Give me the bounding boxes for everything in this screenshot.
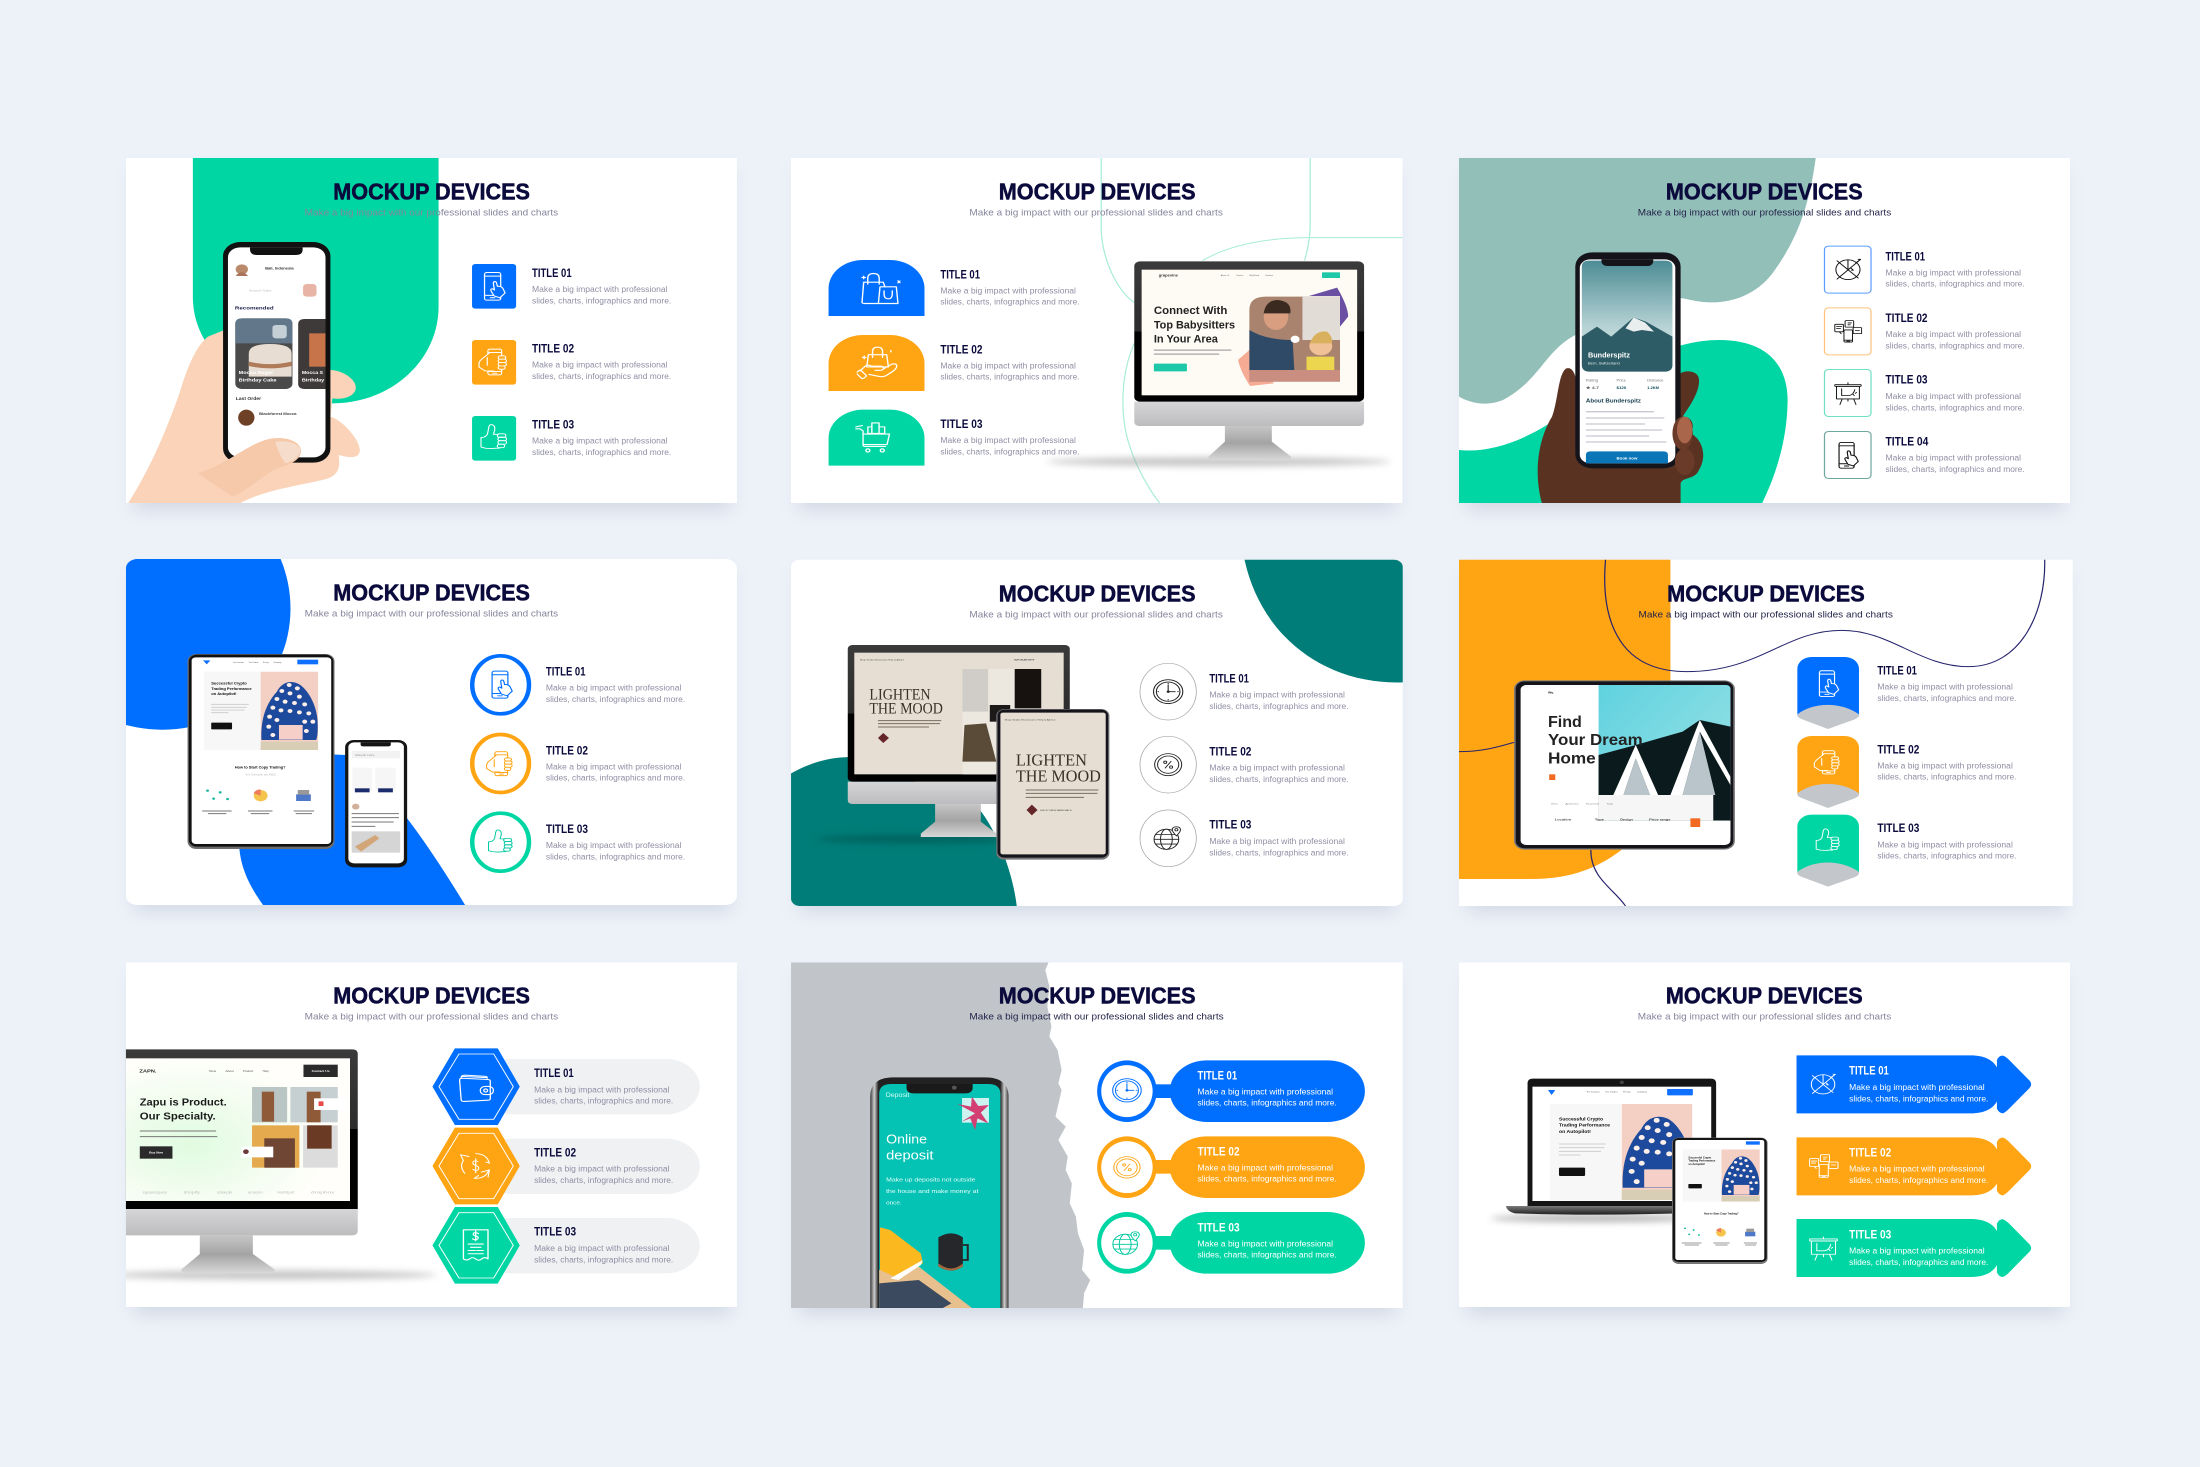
subheading: Make a big impact with our professional slides and charts	[305, 208, 558, 218]
item: title 02	[432, 1128, 700, 1204]
hand holding phone: Rating	[1586, 379, 1598, 383]
monitor mockup: Contact	[1265, 274, 1273, 277]
panel: slide 1 phone in hand	[126, 158, 737, 512]
item: title 03	[432, 1207, 700, 1284]
monitor mockup	[817, 645, 1070, 843]
item: title 01: Make a big impact with professional	[940, 286, 1076, 295]
monitor mockup: ZAPN.	[139, 1069, 157, 1074]
item: title 03: slides, charts, infographics and more.	[1198, 1251, 1337, 1259]
teal blob top right	[1244, 560, 1403, 682]
item: title 03	[1824, 369, 2025, 416]
hand holding phone: Bunderspitz	[1588, 351, 1630, 359]
item: title 02: Make a big impact with professional	[1849, 1165, 1985, 1173]
hand holding phone: Birthday	[302, 378, 325, 383]
panel: slide 6 tablet with curve	[1459, 560, 2073, 913]
subheading: Make a big impact with our professional slides and charts	[1639, 610, 1893, 620]
hand holding phone: Price	[1617, 379, 1626, 383]
tablet mockup: For Investors	[233, 661, 244, 664]
item: title 03: Make a big impact with professional	[1849, 1247, 1985, 1255]
hand holding phone: Bern, Switzerland	[1588, 362, 1620, 366]
monitor mockup: Product	[243, 1069, 253, 1073]
item: title 03	[829, 410, 1080, 466]
item: title 03: Make a big impact with professional	[1886, 392, 2021, 401]
item: title 01: TITLE 01	[546, 665, 586, 678]
tablet mockup: Wy.	[1548, 691, 1554, 694]
hand holding phone: Mocca Sugar	[239, 370, 274, 376]
tablet mockup: Home	[1548, 749, 1596, 767]
item: title 01	[1097, 1060, 1365, 1122]
item: title 02: TITLE 02	[1198, 1145, 1240, 1158]
item: title 01: TITLE 01	[1886, 250, 1925, 263]
monitor mockup	[110, 1049, 437, 1280]
laptop mockup	[1491, 1079, 1716, 1222]
item: title 03: TITLE 03	[1849, 1228, 1891, 1241]
torn grey paper	[791, 962, 1090, 1308]
item: title 02: Make a big impact with professional	[532, 361, 668, 369]
item: title 02	[829, 335, 1080, 391]
item: title 02: Make a big impact with professional	[940, 361, 1076, 370]
item: title 04: Make a big impact with professional	[1886, 454, 2021, 462]
item: title 03: slides, charts, infographics and more.	[546, 852, 685, 861]
item: title 01: slides, charts, infographics and more.	[1877, 694, 2017, 703]
monitor mockup: About Us	[1221, 274, 1230, 277]
heading: MOCKUP DEVICES	[333, 581, 530, 606]
tablet mockup: LIGHTEN	[1016, 751, 1087, 770]
monitor mockup: Buy Now	[149, 1151, 163, 1155]
item: title 01: TITLE 01	[1198, 1069, 1238, 1082]
item: title 03: slides, charts, infographics and more.	[534, 1255, 673, 1264]
item: title 02	[1097, 1136, 1365, 1198]
subheading: Make a big impact with our professional slides and charts	[1638, 1012, 1891, 1022]
item: title 02	[1140, 736, 1349, 793]
item: title 02: TITLE 02	[546, 744, 588, 757]
item: title 01: TITLE 01	[1877, 664, 1917, 677]
item: title 03: TITLE 03	[546, 822, 588, 836]
monitor mockup: dropbox	[311, 1190, 334, 1194]
item: title 01: Make a big impact with professional	[1886, 268, 2021, 277]
item: title 02: Make a big impact with professional	[534, 1165, 670, 1173]
hand holding phone: Birthday Cake	[239, 378, 277, 383]
laptop mockup: Company	[1637, 1092, 1648, 1094]
subheading: Make a big impact with our professional slides and charts	[305, 609, 558, 619]
heading: MOCKUP DEVICES	[333, 180, 530, 205]
item: title 02: slides, charts, infographics and more.	[940, 373, 1080, 381]
monitor mockup: About	[226, 1069, 234, 1073]
panel: slide 7 monitor and hexagons	[110, 962, 737, 1316]
tablet mockup: It's Simple as ABC	[246, 773, 278, 777]
tablet mockup: How to Start Copy Trading?	[235, 765, 286, 770]
item: title 02: slides, charts, infographics and more.	[546, 774, 685, 782]
item: title 03: slides, charts, infographics and more.	[1209, 848, 1349, 857]
tablet mockup: Your Dream	[1548, 731, 1643, 749]
subheading: Make a big impact with our professional slides and charts	[305, 1012, 558, 1022]
item: title 03: slides, charts, infographics and more.	[1877, 852, 2017, 860]
item: title 02	[472, 734, 685, 792]
tablet mockup: on Autopilot!	[1688, 1162, 1705, 1166]
tablet mockup: Find	[1548, 713, 1582, 731]
item: title 03: TITLE 03	[534, 1225, 576, 1238]
tablet mockup: How to Start Copy Trading?	[1704, 1212, 1739, 1216]
subheading: Make a big impact with our professional slides and charts	[969, 208, 1223, 218]
tablet mockup: Trading Performance	[1688, 1159, 1716, 1163]
item: title 01: TITLE 01	[532, 266, 572, 280]
laptop mockup: For Investors	[1587, 1091, 1601, 1094]
item: title 04: slides, charts, infographics and more.	[1886, 465, 2025, 474]
item: title 03: slides, charts, infographics and more.	[1849, 1258, 1988, 1267]
laptop mockup: For Traders	[1606, 1091, 1619, 1094]
item: title 01	[472, 264, 671, 309]
monitor mockup: amazon	[248, 1190, 263, 1194]
item: title 01	[829, 260, 1080, 316]
item: title 03: Make a big impact with professional	[534, 1244, 670, 1253]
tablet mockup: Type	[1595, 818, 1604, 822]
tablet mockup: on Autopilot!	[211, 691, 237, 696]
tablet mockup: SHOP NEW ARRIVALS	[1040, 809, 1073, 812]
tablet mockup: Home	[1551, 803, 1559, 805]
item: title 01	[432, 1048, 700, 1125]
item: title 02	[1797, 1137, 2031, 1195]
tablet mockup: Price range	[1649, 818, 1671, 822]
item: title 03: slides, charts, infographics and more.	[1886, 403, 2025, 412]
item: title 01: slides, charts, infographics and more.	[1209, 702, 1349, 711]
hand holding phone: Bali, Indonesia	[265, 267, 294, 271]
item: title 02: TITLE 02	[1877, 743, 1919, 756]
item: title 02: TITLE 02	[1209, 745, 1251, 758]
item: title 03	[1797, 815, 2017, 887]
item: title 02	[472, 340, 671, 385]
monitor mockup: In Your Area	[1154, 332, 1218, 345]
monitor mockup: Zapu is Product.	[140, 1098, 227, 1108]
item: title 03: Make a big impact with professional	[1209, 837, 1345, 846]
item: title 04: TITLE 04	[1886, 435, 1929, 448]
tablet mockup	[1514, 680, 1735, 850]
item: title 03	[1097, 1212, 1365, 1274]
item: title 02: TITLE 02	[940, 343, 982, 356]
tablet mockup: Sale	[1607, 803, 1614, 805]
monitor mockup: Contact Us	[312, 1069, 330, 1073]
monitor mockup: grapevine	[1159, 273, 1179, 278]
subheading: Make a big impact with our professional slides and charts	[969, 1012, 1224, 1022]
item: title 02: TITLE 02	[1849, 1146, 1891, 1159]
item: title 01: TITLE 01	[534, 1066, 574, 1080]
hand holding phone: Distance	[1647, 379, 1663, 383]
item: title 01	[472, 656, 685, 714]
monitor mockup: Service	[1236, 274, 1244, 277]
item: title 01: slides, charts, infographics and more.	[534, 1097, 673, 1105]
heading: MOCKUP DEVICES	[1667, 582, 1865, 607]
phone mockup: Aktuelle Links	[355, 753, 375, 757]
item: title 01	[1140, 663, 1349, 720]
laptop mockup: Pricing	[1623, 1091, 1631, 1094]
phone mockup: once.	[886, 1200, 902, 1206]
item: title 01: slides, charts, infographics and more.	[1198, 1099, 1337, 1107]
item: title 03: TITLE 03	[532, 418, 574, 431]
item: title 02: slides, charts, infographics and more.	[1209, 775, 1349, 784]
panel: slide 8 phone with torn paper	[791, 962, 1403, 1316]
heading: MOCKUP DEVICES	[999, 984, 1196, 1009]
laptop mockup: Successful Crypto	[1559, 1117, 1603, 1122]
hand holding phone: About Bunderspitz	[1586, 398, 1641, 404]
phone mockup	[870, 1077, 1009, 1310]
hand holding phone: Last Order	[236, 396, 261, 402]
tablet mockup: Pricing	[263, 662, 269, 664]
phone mockup: Online	[886, 1132, 927, 1146]
hand holding phone: 1.2KM	[1647, 385, 1659, 390]
hand holding phone: Book now	[1617, 456, 1638, 461]
item: title 02: Make a big impact with professional	[546, 762, 681, 771]
tablet mockup	[188, 654, 334, 849]
heading: MOCKUP DEVICES	[999, 180, 1196, 205]
item: title 02: slides, charts, infographics and more.	[534, 1176, 673, 1185]
heading: MOCKUP DEVICES	[333, 984, 530, 1009]
tablet mockup: Successful Crypto	[1688, 1156, 1712, 1159]
item: title 03	[472, 416, 671, 461]
monitor mockup: Shop Studio Showrooms Help & Advice	[860, 659, 905, 661]
item: title 01: slides, charts, infographics and more.	[1849, 1094, 1988, 1103]
teal blob bottom left	[791, 757, 1017, 906]
monitor mockup: Connect With	[1154, 304, 1227, 317]
orange blob	[1459, 560, 1670, 879]
item: title 01: slides, charts, infographics and more.	[1886, 280, 2025, 288]
tablet mockup	[1672, 1138, 1768, 1264]
subheading: Make a big impact with our professional slides and charts	[1638, 208, 1891, 218]
green blob	[193, 158, 439, 403]
item: title 02: slides, charts, infographics and more.	[1198, 1175, 1337, 1183]
item: title 01: TITLE 01	[1849, 1064, 1889, 1077]
item: title 01: Make a big impact with professional	[532, 285, 668, 294]
item: title 03: TITLE 03	[1198, 1221, 1240, 1234]
subheading: Make a big impact with our professional slides and charts	[969, 610, 1223, 620]
tablet mockup: Houseworld	[1586, 803, 1600, 805]
blue blob top	[126, 559, 290, 730]
tablet mockup: For Traders	[249, 662, 259, 664]
item: title 02: Make a big impact with professional	[1209, 764, 1345, 772]
tablet mockup: Apartment	[1566, 803, 1579, 805]
monitor mockup	[1047, 261, 1390, 466]
tablet mockup: Location	[1555, 818, 1571, 822]
item: title 02	[1797, 736, 2017, 808]
tablet mockup: THE MOOD	[1016, 767, 1101, 786]
item: title 03: Make a big impact with professional	[546, 841, 681, 850]
monitor mockup: My Book	[1249, 275, 1260, 277]
item: title 03: slides, charts, infographics and more.	[532, 448, 671, 457]
item: title 04	[1824, 431, 2025, 478]
item: title 03	[1797, 1219, 2031, 1277]
tablet mockup: Design	[1620, 818, 1633, 822]
item: title 01	[1797, 657, 2017, 729]
item: title 03	[472, 813, 685, 871]
monitor mockup: OUR ONLINE SHOP	[1014, 659, 1035, 661]
hand holding phone: Mocca S	[302, 370, 323, 376]
item: title 03: TITLE 03	[1209, 818, 1251, 831]
item: title 03: Make a big impact with professional	[940, 436, 1076, 445]
item: title 01: Make a big impact with professional	[1849, 1083, 1985, 1092]
hand holding phone: Recomended	[235, 306, 274, 311]
monitor mockup: Our Specialty.	[140, 1112, 216, 1122]
item: title 03: Make a big impact with professional	[1877, 840, 2013, 849]
monitor mockup: Help	[263, 1069, 269, 1073]
phone mockup: the house and make money at	[886, 1189, 979, 1195]
tablet mockup: Successful Crypto	[211, 681, 247, 686]
monitor mockup: LIGHTEN	[869, 686, 931, 703]
panel: slide 9 laptop and arrows	[1459, 962, 2070, 1316]
panel: slide 2 desktop monitor	[791, 158, 1402, 512]
panel: slide 3 phone with blobs	[1459, 158, 2070, 512]
heading: MOCKUP DEVICES	[999, 582, 1196, 607]
item: title 01: slides, charts, infographics and more.	[532, 296, 671, 305]
laptop mockup: Trading Performance	[1559, 1123, 1610, 1128]
item: title 01: slides, charts, infographics and more.	[940, 298, 1080, 306]
monitor mockup: shopify	[183, 1190, 201, 1194]
hand holding phone: Search Cake	[249, 289, 272, 293]
phone mockup: Make up deposits not outside	[886, 1177, 976, 1183]
blue blob bottom	[239, 754, 465, 905]
phone mockup: deposit	[886, 1148, 934, 1162]
item: title 01	[1824, 246, 2025, 293]
item: title 03: TITLE 03	[940, 417, 982, 431]
monitor mockup: Home	[209, 1069, 216, 1073]
monitor mockup: HubSpot	[277, 1190, 295, 1194]
heading: MOCKUP DEVICES	[1666, 984, 1863, 1009]
item: title 03: TITLE 03	[1886, 373, 1928, 386]
item: title 03: TITLE 03	[1877, 821, 1919, 835]
hand holding phone	[128, 242, 360, 503]
item: title 01: slides, charts, infographics and more.	[546, 695, 685, 704]
item: title 02: slides, charts, infographics and more.	[1877, 773, 2017, 781]
item: title 02: slides, charts, infographics and more.	[532, 372, 671, 381]
item: title 03: Make a big impact with professional	[532, 437, 668, 445]
tablet mockup	[996, 709, 1109, 860]
item: title 02: slides, charts, infographics and more.	[1886, 341, 2025, 350]
hand holding phone: ★ 4.7	[1585, 385, 1600, 390]
monitor mockup: squarespace	[143, 1190, 168, 1194]
item: title 03	[1140, 810, 1349, 867]
hand holding phone: $120	[1617, 385, 1627, 390]
item: title 01: Make a big impact with professional	[1209, 691, 1345, 699]
item: title 01: Make a big impact with professional	[1877, 683, 2013, 691]
phone mockup: Deposit	[886, 1093, 910, 1099]
item: title 02: Make a big impact with professional	[1877, 761, 2013, 770]
item: title 02: Make a big impact with professional	[1886, 330, 2021, 339]
item: title 01: Make a big impact with professional	[534, 1085, 670, 1094]
monitor mockup: slack	[217, 1190, 234, 1194]
panel: slide 4 tablet and phone	[126, 559, 737, 913]
grey teal blob	[1459, 158, 1816, 404]
item: title 02: TITLE 02	[1886, 311, 1928, 325]
item: title 02	[1824, 308, 2025, 355]
tablet mockup: Trading Performance	[211, 686, 252, 691]
item: title 01: Make a big impact with professional	[1198, 1087, 1333, 1096]
tablet mockup: Shop Studio Showrooms Help & Advice	[1004, 719, 1057, 722]
item: title 01: Make a big impact with professional	[546, 684, 681, 692]
monitor mockup: THE MOOD	[869, 700, 943, 717]
monitor mockup: Top Babysitters	[1154, 318, 1235, 331]
item: title 01	[1797, 1055, 2031, 1113]
item: title 03: slides, charts, infographics and more.	[940, 447, 1080, 456]
item: title 02: TITLE 02	[534, 1146, 576, 1159]
hand holding phone: Blackforest Mocca	[259, 412, 298, 416]
item: title 01: TITLE 01	[940, 268, 980, 281]
heading: MOCKUP DEVICES	[1666, 180, 1863, 205]
panel: slide 5 monitor and tablet	[791, 560, 1403, 913]
item: title 01: TITLE 01	[1209, 672, 1249, 685]
item: title 03: Make a big impact with professional	[1198, 1239, 1333, 1248]
laptop mockup: on Autopilot!	[1559, 1129, 1591, 1135]
green blob	[1459, 340, 1788, 503]
item: title 02: slides, charts, infographics and more.	[1849, 1176, 1988, 1185]
item: title 02: Make a big impact with professional	[1198, 1163, 1333, 1172]
item: title 02: TITLE 02	[532, 342, 574, 355]
phone mockup	[345, 740, 407, 867]
tablet mockup: Company	[273, 662, 282, 664]
hand holding phone	[1538, 252, 1703, 503]
